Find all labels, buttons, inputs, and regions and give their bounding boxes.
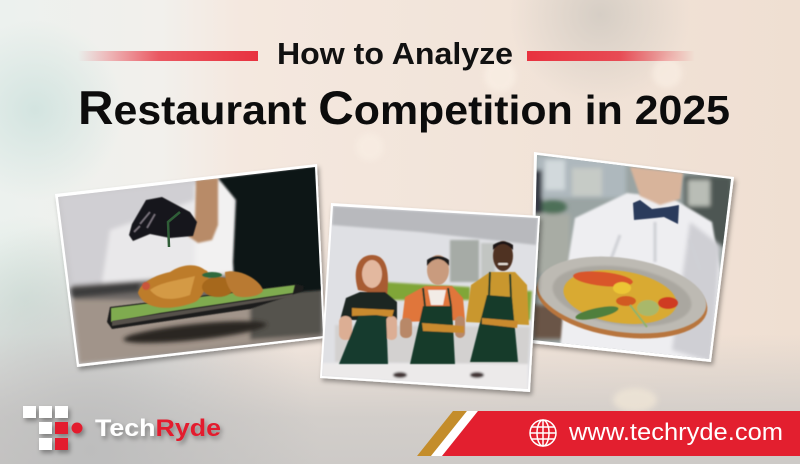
logo: TechRyde (23, 406, 221, 450)
heading line 1: How to Analyze (277, 36, 513, 71)
website banner (417, 411, 800, 456)
photo: waiter holding plate (530, 152, 734, 362)
banner stripe: white (431, 411, 478, 456)
logo wordmark: Tech Ryde (95, 415, 221, 442)
website url: www.techryde.com (568, 419, 783, 446)
photo: chef garnishing chicken (55, 164, 325, 367)
person left (339, 255, 397, 364)
left decorative bar (78, 51, 258, 61)
right decorative bar (527, 51, 695, 61)
icon: globe (530, 420, 556, 446)
heading line 2: Restaurant Competition in 2025 (78, 81, 730, 134)
banner stripe: gold (417, 411, 467, 456)
banner red bar (442, 411, 800, 456)
person right (466, 241, 529, 362)
photo: three chefs with trays (320, 203, 540, 392)
icon: pixel T mark (23, 406, 82, 450)
person centre (400, 255, 465, 364)
title block (78, 36, 730, 134)
